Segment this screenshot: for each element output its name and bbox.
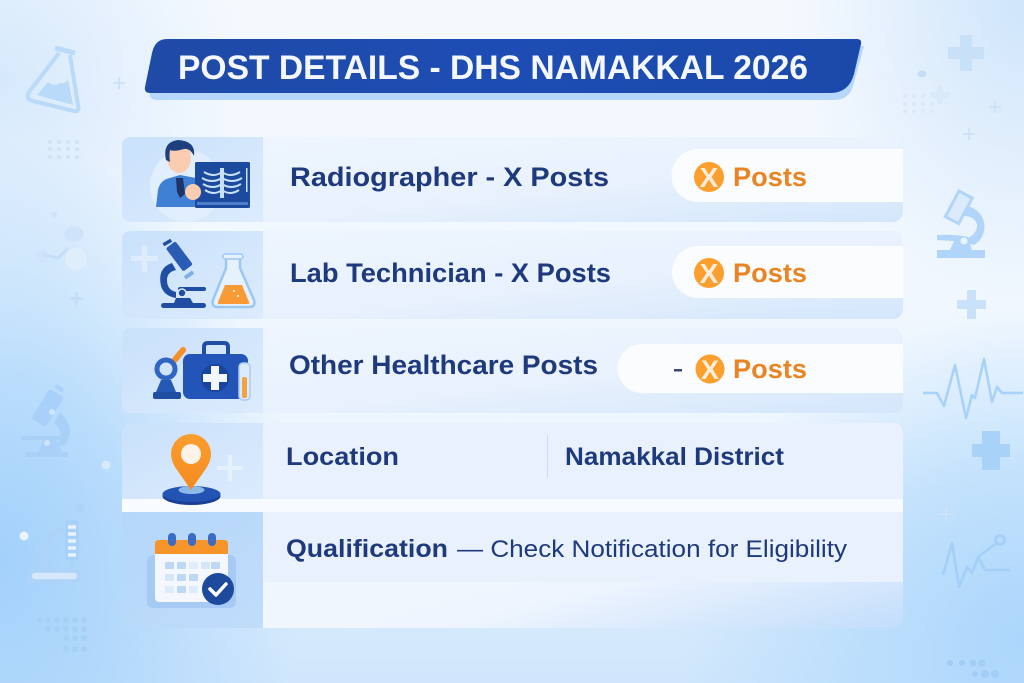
title banner [145, 39, 864, 100]
dot pattern: upper right [903, 94, 934, 113]
label: lab technician: Lab Technician - X Posts [290, 258, 611, 288]
label: qualification: Qualification [286, 535, 448, 563]
icon: lab instrument watermark [30, 503, 85, 581]
decorative plus signs and dots [20, 35, 1010, 540]
panel: lab technician row [122, 231, 903, 319]
icon: location pin [162, 434, 220, 505]
banner shadow [150, 46, 864, 100]
white separator [122, 499, 903, 512]
label: radiographer: Radiographer - X Posts [290, 162, 609, 192]
icon: flask with orange liquid [213, 254, 254, 307]
icon: small microscope [153, 350, 183, 399]
plus watermarks [217, 455, 243, 481]
dot pattern: lower right [947, 660, 999, 678]
pill: other healthcare posts: X [701, 355, 719, 385]
pill: lab technician posts [672, 246, 903, 298]
pill: radiographer posts: Posts [733, 162, 807, 192]
pill: radiographer posts [672, 149, 903, 202]
pill: lab technician posts: X [700, 258, 719, 289]
value: namakkal district: Namakkal District [565, 443, 785, 471]
plus watermark [131, 245, 158, 272]
row tint: location [263, 423, 903, 499]
chart: ECG line lower [943, 536, 1010, 587]
title: POST DETAILS - DHS NAMAKKAL 2026 [178, 49, 808, 87]
icon: medical kit [183, 343, 248, 399]
panel: other healthcare row [122, 328, 903, 413]
icon: radiographer with x-ray [150, 140, 250, 222]
pill: lab technician posts: Posts [733, 258, 807, 288]
panel: radiographer row [122, 137, 903, 222]
icon panel background: location [122, 423, 263, 499]
dot pattern: lower left [37, 617, 87, 652]
icon panel background [122, 137, 263, 222]
icon: test tube [239, 363, 250, 400]
pill: other healthcare posts: Posts [733, 354, 807, 384]
icon panel background [122, 231, 263, 319]
value: check notification: — Check Notification for Eligibility [457, 536, 847, 563]
icon: calendar with check [147, 533, 236, 608]
icon: microscope [160, 239, 206, 308]
label: location: Location [286, 443, 399, 471]
icon: microscope watermark right [937, 191, 985, 258]
label: other healthcare posts: Other Healthcare Posts [289, 350, 598, 380]
chart: ECG line upper [923, 359, 1023, 418]
pill: other healthcare posts [618, 344, 903, 393]
banner shape [145, 39, 861, 93]
row tint: qualification [263, 512, 903, 582]
panel: location and qualification [122, 423, 903, 628]
pill: radiographer posts: X [700, 162, 719, 193]
icon: microscope watermark left [21, 384, 70, 457]
divider [547, 435, 548, 478]
icon panel background: qualification [122, 512, 263, 628]
dot pattern: upper left [48, 140, 79, 159]
icon: molecule watermark [36, 212, 87, 270]
icon: flask watermark [28, 48, 79, 111]
icon panel background [122, 328, 263, 413]
